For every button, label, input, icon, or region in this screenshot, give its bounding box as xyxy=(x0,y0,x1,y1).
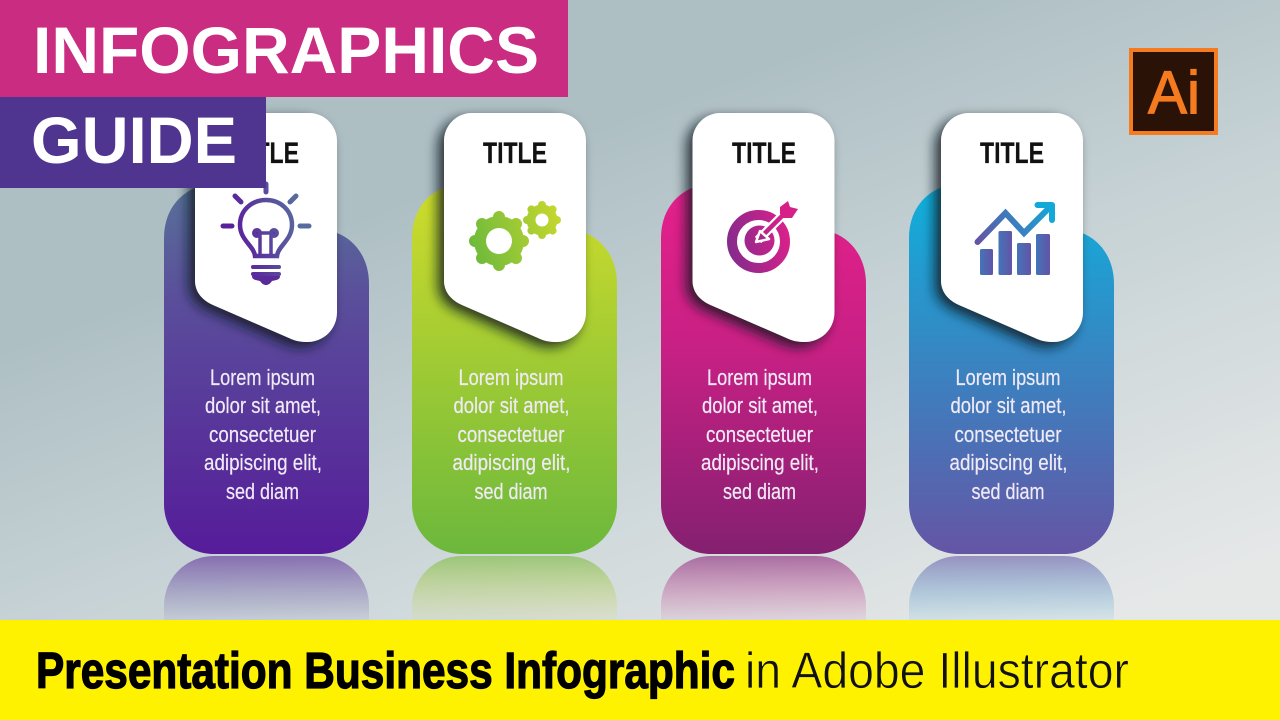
icon: rising bar chart xyxy=(978,205,1052,275)
card 2 body text: sed diam xyxy=(474,479,548,504)
card 2 white tab xyxy=(444,113,586,342)
footer bold title: Presentation Business Infographic xyxy=(36,642,735,699)
card 3 body text xyxy=(701,365,819,504)
card 1 body text: consectetuer xyxy=(209,422,316,447)
heading: guide banner xyxy=(0,97,266,188)
card 3 body text: consectetuer xyxy=(706,422,813,447)
icon: light bulb xyxy=(223,184,309,285)
card 3 body text: Lorem ipsum xyxy=(707,365,812,390)
footer banner xyxy=(0,620,1280,720)
icon: Adobe Illustrator logo xyxy=(1129,48,1218,135)
card 4 coloured body xyxy=(909,186,1114,554)
card 3 body text: dolor sit amet, xyxy=(702,393,818,418)
icon: target with arrow xyxy=(732,201,798,268)
card 3 white tab xyxy=(692,113,834,342)
card 4 body text: adipiscing elit, xyxy=(950,450,1068,475)
card 4 body text: sed diam xyxy=(972,479,1044,504)
footer light subtitle: in Adobe Illustrator xyxy=(745,642,1129,699)
panel: card 3 reflection xyxy=(661,556,866,620)
card 2 body text: dolor sit amet, xyxy=(454,393,570,418)
panel: card 1 xyxy=(164,113,369,554)
card 3 title: TITLE xyxy=(732,137,796,170)
card 4 body text xyxy=(950,365,1068,504)
card 1 white tab xyxy=(195,113,337,342)
heading: guide banner: GUIDE xyxy=(31,103,237,177)
panel: card 4 reflection xyxy=(909,556,1114,620)
card 2 coloured body xyxy=(412,186,617,554)
icon: gears xyxy=(474,204,558,266)
card 1 title: TITLE xyxy=(235,137,299,170)
card 1 body text: dolor sit amet, xyxy=(205,393,321,418)
card 3 body text: adipiscing elit, xyxy=(701,450,819,475)
card 4 body text: consectetuer xyxy=(954,422,1062,447)
icon: Adobe Illustrator logo: Ai xyxy=(1148,59,1200,126)
card 1 coloured body xyxy=(164,186,369,554)
card 3 coloured body xyxy=(661,186,866,554)
card 4 white tab xyxy=(941,113,1083,342)
panel: card 3 xyxy=(661,113,866,554)
card 1 body text: sed diam xyxy=(226,479,299,504)
card 2 body text xyxy=(452,365,570,504)
card 3 body text: sed diam xyxy=(723,479,796,504)
card 1 body text: Lorem ipsum xyxy=(210,365,315,390)
heading: infographics banner: INFOGRAPHICS xyxy=(33,13,539,87)
card 4 body text: dolor sit amet, xyxy=(950,393,1066,418)
panel: card 4 xyxy=(909,113,1114,554)
card 1 body text: adipiscing elit, xyxy=(204,450,322,475)
panel: card 1 reflection xyxy=(164,556,369,620)
card 4 title: TITLE xyxy=(980,137,1044,170)
panel: card 2 xyxy=(412,113,617,554)
panel: card 2 reflection xyxy=(412,556,617,620)
card 2 body text: consectetuer xyxy=(458,422,564,447)
card 4 body text: Lorem ipsum xyxy=(956,365,1060,390)
card 2 body text: Lorem ipsum xyxy=(458,365,564,390)
card 2 title: TITLE xyxy=(483,137,547,170)
heading: infographics banner xyxy=(0,0,568,97)
card 1 body text xyxy=(204,365,322,504)
card 2 body text: adipiscing elit, xyxy=(452,450,570,475)
